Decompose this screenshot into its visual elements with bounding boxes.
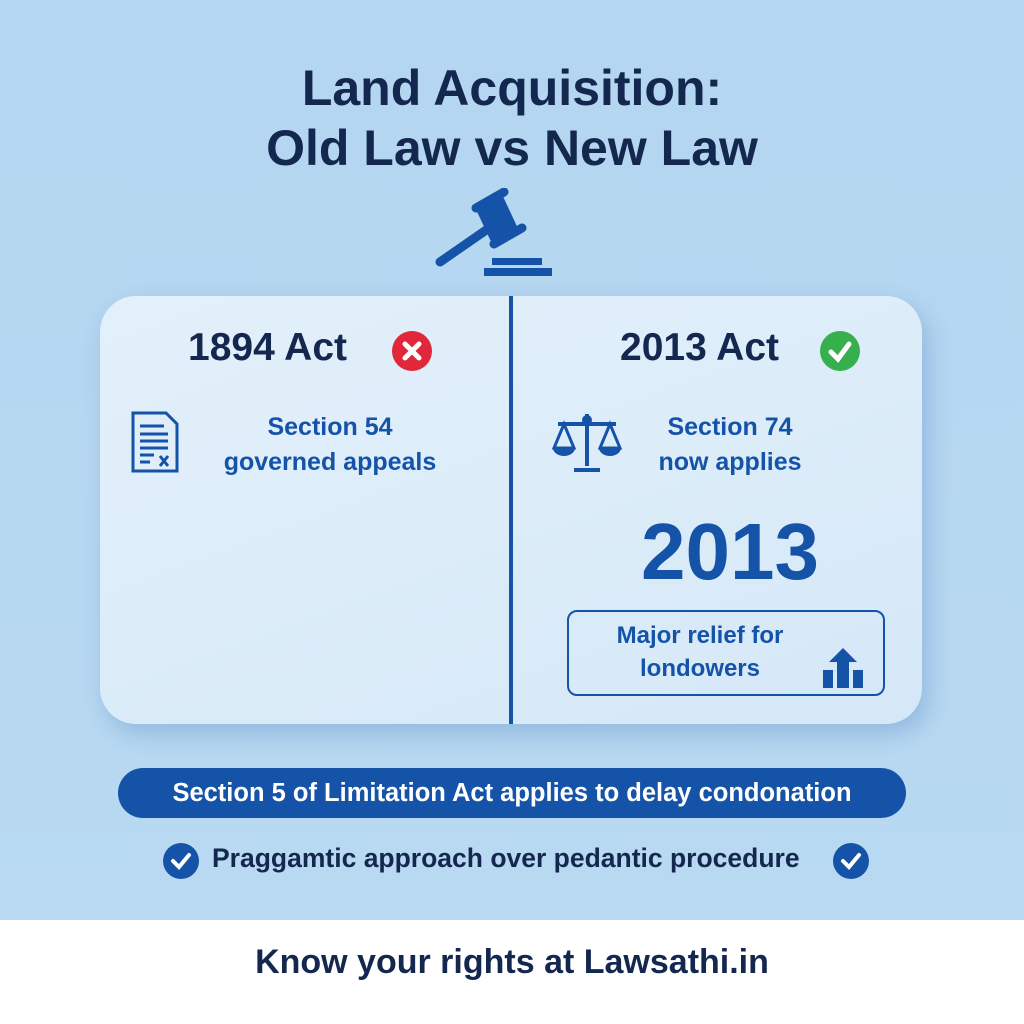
heading: 2013 Act: 2013 Act: [620, 326, 779, 369]
heading: 1894 Act: 1894 Act: [188, 326, 347, 369]
icon: red cross: [392, 331, 432, 371]
text: section 54: [224, 413, 436, 476]
footer: Know your rights at Lawsathi.in: [255, 943, 769, 981]
title: [266, 60, 758, 176]
icon: gavel: [436, 188, 552, 276]
callout: major relief: londowers: [640, 655, 760, 682]
text: section 54: Section 54: [267, 413, 393, 441]
banner: limitation act: [118, 768, 906, 818]
callout: major relief: Major relief for: [617, 622, 783, 649]
big number 2013: 2013: [641, 507, 819, 596]
text: section 54: governed appeals: [224, 448, 436, 476]
icon: arrow bars: [823, 648, 863, 688]
icon: green check: [820, 331, 860, 371]
callout: major relief: [567, 610, 885, 696]
text: pragmatic approach: Praggamtic approach over pedantic procedure: [212, 843, 800, 873]
title: Old Law vs New Law: [266, 120, 758, 176]
icon: document: [132, 412, 178, 472]
divider: [509, 296, 513, 724]
text: section 74: now applies: [658, 448, 802, 476]
text: section 74: Section 74: [667, 413, 793, 441]
icon: scales: [552, 414, 622, 472]
text: pragmatic approach: [163, 843, 869, 879]
text: section 74: [658, 413, 802, 476]
panel: comparison card: [100, 296, 922, 724]
title: Land Acquisition:: [302, 60, 722, 116]
banner: limitation act: Section 5 of Limitation Act applies to delay condonation: [172, 779, 852, 807]
